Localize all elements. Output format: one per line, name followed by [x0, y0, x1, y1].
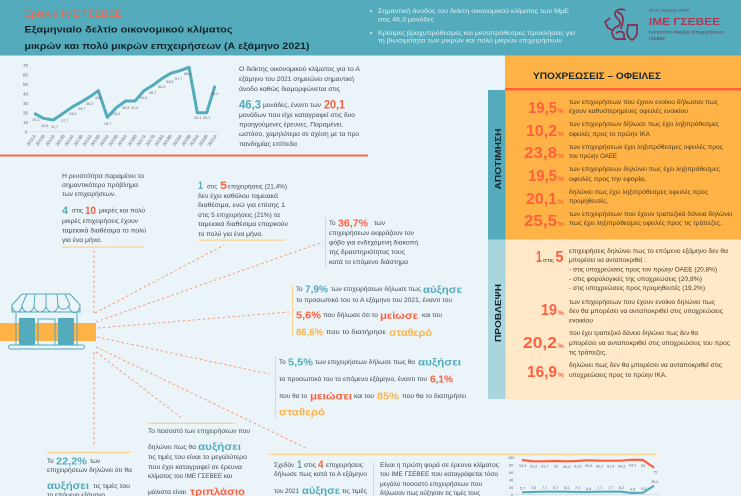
tab: valuation: ΑΠΟΤΙΜΗΣΗ [493, 128, 503, 190]
line chart: climate index: 2021Α [206, 134, 218, 147]
text block: 1 in 5 without cash: διαθέσιμα, ενώ για επίσης 1 [198, 202, 286, 209]
line chart: price trend: 90,9 [618, 464, 625, 468]
line chart: price trend: 91,2 [530, 464, 537, 468]
stat 1 in 5: - στις υποχρεώσεις προς τον πρώην ΟΑΕΕ (20,8%) [569, 266, 717, 274]
text block: staff change first half: και του [422, 312, 443, 319]
stat 19 percent: % [558, 310, 564, 317]
line chart: price trend: 6,5 [586, 487, 591, 491]
text block: 1 in 5 without cash: στις 5 επιχειρήσεις (21%) τα [198, 212, 280, 219]
line chart: climate index: 2019Β [180, 134, 192, 147]
text block: liquidity: Η ρευστότητα παραμένει το [62, 173, 145, 180]
text block: staff change first half: Το [296, 286, 303, 293]
tab: valuation [488, 90, 506, 240]
stat 25,5 banks: πως έχει ληξιπρόθεσμες οφειλές προς τις τράπεζες. [569, 220, 722, 227]
text block: liquidity: ταμειακά διαθέσιμα το πολύ [62, 228, 147, 234]
line chart: climate index: 50,6 [158, 85, 165, 89]
line chart: price trend: 25,4 [651, 480, 658, 484]
text block: staff change first half [292, 284, 462, 339]
text block: 36,7 percent fear: των [374, 220, 385, 227]
stat 1 in 5: μπορέσει να ανταποκριθεί : [569, 257, 646, 264]
line chart: climate index: 2014Β [89, 134, 101, 147]
text block: 1 in 4 raised prices: στις [304, 462, 316, 469]
stat 1 in 5: 5 [556, 249, 564, 266]
text block: liquidity [62, 173, 147, 248]
line chart: climate index: 20 [23, 110, 28, 116]
key points [370, 8, 575, 44]
line chart: climate index: 2012Α [44, 134, 56, 147]
line chart: climate index: 24,0 [69, 112, 76, 116]
line chart: climate index: 65,6 [184, 72, 191, 76]
line chart: climate index: 20,1 [203, 116, 210, 120]
stat 19,5 rent: των επιχειρήσεων που έχουν ενοίκιο δήλωσαν πως [569, 99, 718, 106]
stat 23,8 OAEE: των επιχειρήσεων έχει ληξιπρόθεσμες οφειλές προς [569, 144, 723, 151]
text block: 36,7 percent fear [325, 217, 419, 267]
line chart: price trend: 80 [509, 464, 513, 468]
line chart: climate index: 60 [23, 72, 28, 78]
logo: Έτος Ίδρυσης 2006 [648, 8, 690, 12]
text block: 36,7 percent fear: κατά το επόμενο διάστημα [329, 259, 408, 266]
text block: liquidity: μικρές και πολύ [99, 208, 146, 214]
text block: first time in survey: Είναι η πρώτη φορά σε έρευνα κλίματος [380, 462, 499, 469]
text block: price rise 22,2 percent: επιχειρήσεων δηλώνει ότι θα [47, 467, 132, 474]
line chart: price trend: 7,6 [531, 486, 536, 490]
survey label: Έρευνα ΙΜΕ ΓΣΕΒΕΕ [22, 9, 122, 20]
stat 19,5 tax [528, 166, 720, 185]
text block: 1 in 4 raised prices: Σχεδόν [274, 462, 294, 469]
text block: staff change next half: των επιχειρήσεων δήλωσε πως θα [315, 359, 415, 366]
line chart: price trend: 90,4 [563, 465, 570, 469]
text block: staff change first half: το προσωπικό του το Α εξάμηνο του 2021, έναντι του [296, 297, 453, 304]
text block: 1 in 4 raised prices: επιχειρήσεις [326, 462, 363, 469]
line chart: climate index: 17,7 [61, 119, 68, 123]
text block: 1 in 5 without cash: ταμειακά διαθέσιμα επαρκούν [198, 221, 288, 228]
logo [605, 8, 724, 41]
dashed connector lines [94, 242, 323, 449]
text block: highest share of price rises: μάλιστα είναι [148, 489, 187, 496]
line chart: climate index: 70 [23, 63, 28, 68]
stat 19,5 rent [528, 99, 718, 117]
text block: 1 in 4 raised prices: 4 [318, 459, 324, 471]
text block: 1 in 4 raised prices: δήλωσε πως κατά το Α εξάμηνο [274, 471, 368, 478]
line chart: climate index: 2012Β [54, 134, 66, 147]
line chart: price trend: 40 [509, 478, 513, 482]
line chart: climate index: 2016Β [126, 134, 138, 147]
line chart: price trend: 4,5 [630, 488, 635, 492]
line chart: price trend: 5,5 [641, 487, 646, 491]
stat 10,2 IKA: 10,2 [526, 123, 557, 140]
line chart: climate index: 13,6 [41, 124, 48, 128]
line chart: price trend: 8,2 [619, 486, 624, 490]
line chart: price trend: 20 [509, 486, 513, 490]
line chart: price trend: 8,7 [553, 486, 558, 490]
text block: highest share of price rises: κλίματος του ΙΜΕ ΓΣΕΒΕΕ και [148, 473, 233, 480]
stat 16,9 percent [527, 362, 722, 381]
panel: forecast [488, 240, 741, 399]
text block: 1 in 4 raised prices [274, 459, 368, 496]
text block: 1 in 5 without cash: το πολύ για ένα μήνα. [198, 231, 263, 238]
text block: price rise 22,2 percent: τις τιμές του [93, 483, 131, 490]
line chart: climate index: 46,3 [211, 92, 218, 96]
text block: staff change next half: 6,1% [430, 374, 453, 386]
climate index commentary: μονάδες, έναντι των [263, 102, 321, 109]
line chart: climate index: 30,8 [122, 106, 129, 110]
stat 19,5 tax: των επιχειρήσεων δηλώνει πως έχει ληξιπρόθεσμες [569, 166, 720, 173]
line chart: price trend: 100 [508, 456, 514, 460]
stat 1 in 5: 1 [536, 249, 542, 266]
text block: staff change next half: 85% [377, 392, 399, 402]
text block: 36,7 percent fear: 36,7% [338, 218, 369, 230]
line chart: climate index: 29,7 [78, 107, 85, 111]
text block: highest share of price rises: τις τιμές του είναι το μεγαλύτερο [148, 454, 248, 461]
text block: staff change next half: 5,5% [288, 358, 313, 368]
stat 16,9 percent: δηλώνει πως δεν θα μπορέσει να ανταποκριθεί στις [569, 362, 722, 369]
line chart: climate index: 41,5 [95, 96, 102, 100]
climate index commentary: άνοδο καθώς διαμορφώνεται στις [239, 86, 340, 93]
line chart: climate index: 46,7 [149, 91, 156, 95]
line chart: climate index: 2018Α [153, 134, 165, 147]
stat 19,5 tax: 19,5 [528, 168, 557, 185]
text block: 36,7 percent fear: της δραστηριότητας τους [329, 249, 405, 256]
stat 19,5 tax: % [558, 176, 564, 183]
line chart: climate index: 10 [23, 120, 28, 125]
line chart: climate index: 2015Β [107, 134, 119, 147]
title line one: Εξαμηνιαίο δελτίο οικονομικού κλίματος [24, 24, 233, 36]
line chart: price trend: 8,4 [564, 486, 569, 490]
stat 20,2 percent: μπορέσει να ανταποκριθεί στις υποχρεώσεις του προς [569, 340, 730, 347]
line chart: climate index: 11,7 [51, 125, 58, 129]
text block: staff change next half: και του [354, 393, 375, 400]
line chart: climate index: 41,0 [140, 96, 147, 100]
stat 25,5 banks: % [558, 221, 564, 228]
stat 10,2 IKA: των επιχειρήσεων δήλωσε πως έχει ληξιπρόθεσμες [569, 121, 719, 128]
stat 19,5 rent: % [558, 108, 564, 115]
stat 23,8 OAEE [524, 144, 723, 162]
stat 10,2 IKA: οφειλές προς το πρώην ΙΚΑ [569, 131, 651, 138]
stat 25,5 banks: των επιχειρήσεων που έχουν τραπεζικά δάνεια δηλώνει [569, 211, 733, 218]
text block: staff change next half: που θα το διατηρήσει [402, 393, 467, 400]
stat 19,5 tax: οφειλές προς την εφορία, [569, 176, 646, 183]
text block: liquidity: μικρές επιχειρήσεις έχουν [62, 218, 138, 225]
stat 1 in 5: στις [543, 258, 554, 264]
text block: 1 in 5 without cash: 1 [198, 180, 203, 192]
line chart: climate index: 2018Β [161, 134, 173, 147]
line chart: price trend: 91 [554, 464, 558, 468]
line chart: climate index: 31,0 [131, 106, 138, 110]
text block: price rise 22,2 percent: Το [47, 458, 54, 465]
text block: staff change first half: αύξησε [423, 284, 462, 296]
stat 19 percent: δεν θα μπορέσει να ανταποκριθεί στις υποχρεώσεις [569, 308, 723, 315]
climate index commentary: εξάμηνο του 2021 σημειώνει σημαντική [239, 76, 355, 83]
text block: price rise 22,2 percent [47, 452, 132, 496]
line chart: climate index: 2011Β [35, 134, 46, 147]
stat 1 in 5: επιχειρήσεις δηλώνει πως το επόμενο εξάμηνο δεν θα [569, 248, 728, 255]
text block: price rise 22,2 percent: αυξήσει [47, 480, 89, 492]
text block: first time in survey [373, 462, 499, 496]
climate index commentary: μονάδων που είχε καταγραφεί στις δυο [239, 112, 356, 119]
stat 16,9 percent: υποχρεώσεις προς το πρώην ΙΚΑ. [569, 372, 667, 379]
text block: staff change first half: 5,6% [296, 310, 321, 322]
stat 10,2 IKA: % [558, 131, 564, 138]
climate index commentary: ωστόσο, χαμηλότερα σε σχέση με τα προ [239, 131, 360, 138]
text block: liquidity: για ένα μήνα. [62, 237, 102, 244]
stat 19 percent: ενοικίου [569, 318, 594, 324]
line chart: climate index: 50 [23, 82, 28, 87]
line chart: climate index: 2019Α [171, 134, 183, 147]
text block: highest share of price rises: αυξήσει [198, 441, 241, 453]
line chart: price trend: 90,2 [596, 464, 603, 468]
stat 20,1 suppliers: δηλώνει πως έχει ληξιπρόθεσμες οφειλές προς [569, 189, 708, 196]
key points: στις 46,3 μονάδες [378, 16, 434, 24]
text block: highest share of price rises: Το ποσοστό των επιχειρήσεων που [148, 428, 251, 435]
line chart: climate index: 2017Β [144, 134, 156, 147]
text block: staff change next half: Το [279, 359, 286, 366]
stat 19,5 rent: 19,5 [528, 100, 557, 117]
tab: forecast: ΠΡΟΒΛΕΨΗ [493, 284, 503, 342]
key points: Σημαντική άνοδος του δείκτη οικονομικού κλίματος των ΜμΕ [378, 8, 569, 15]
text block: 1 in 4 raised prices: του 2021 [274, 488, 300, 495]
line chart: price trend: 91,7 [541, 464, 548, 468]
text block: staff change first half: 7,9% [305, 284, 328, 296]
line chart: price trend: 94,1 [629, 464, 636, 468]
text block: staff change next half: που θα το [279, 393, 308, 400]
line chart: price trend: 60 [509, 471, 513, 475]
text block: liquidity: σημαντικότερο πρόβλημα [62, 182, 138, 189]
text block: first time in survey: του ΙΜΕ ΓΣΕΒΕΕ που καταγράφεται τόσο [380, 471, 499, 478]
text block: 1 in 4 raised prices: 1 [297, 459, 302, 471]
icon: lion and shield [605, 9, 637, 40]
line chart: price trend: 7,7 [597, 486, 602, 490]
text block: highest share of price rises: που έχει καταγραφεί σε έρευνα [148, 464, 242, 471]
line chart: climate index: 2020Β [197, 134, 209, 147]
text block: liquidity: στις [72, 208, 83, 214]
line chart: climate index: 2013Α [63, 134, 75, 147]
key points: Κρίσιμες βραχυπρόθεσμες και μεσοπρόθεσμες προκλήσεις για [378, 30, 575, 37]
text block: staff change first half: που δήλωσε ότι το [323, 312, 379, 319]
text block: 1 in 5 without cash [198, 180, 288, 241]
stat 1 in 5: - στις υποχρεώσεις προς προμηθευτές (19,2%) [569, 285, 705, 292]
stat 19,5 rent: έχουν καθυστερημένες οφειλές ενοικίου [569, 108, 689, 115]
text block: price rise 22,2 percent: των [90, 458, 100, 465]
header band [0, 0, 741, 56]
stat 20,1 suppliers: προμηθευτές, [569, 198, 608, 205]
stat 1 in 5: - στις φορολογικές της υποχρεώσεις (20,8%) [569, 276, 702, 283]
climate index commentary: Ο δείκτης οικονομικού κλίματος για το Α [239, 66, 361, 73]
stat 20,2 percent: τις τράπεζες. [569, 350, 607, 356]
stat 20,2 percent: που έχει τραπεζικό δάνειο δηλώνει πως δεν θα [569, 330, 698, 337]
logo: Ινστιτούτο Μικρών Επιχειρήσεων [649, 30, 724, 34]
line chart: climate index: 2011Α [26, 134, 37, 147]
text block: staff change next half: αυξήσει [418, 356, 461, 368]
line chart: climate index: 35,2 [86, 102, 93, 106]
stat 20,2 percent: % [558, 343, 564, 350]
text block: first time in survey: μεγάλο ποσοστό επιχειρήσεων που [380, 481, 483, 488]
line chart: price trend: 5,7 [520, 486, 525, 490]
tab: forecast [488, 240, 506, 399]
climate index commentary [239, 66, 361, 148]
stat 10,2 IKA [526, 121, 719, 140]
stat 23,8 OAEE: 23,8 [524, 145, 557, 162]
line chart: climate index: 2013Β [72, 134, 84, 147]
line chart: climate index: 54,8 [166, 80, 173, 84]
text block: 1 in 5 without cash: στις [207, 184, 217, 190]
text block: liquidity: των επιχειρήσεων. [62, 191, 116, 198]
text block: staff change next half: σταθερό [279, 406, 325, 418]
stat 23,8 OAEE: τον πρώην ΟΑΕΕ [569, 153, 617, 160]
stat 19 percent: των επιχειρήσεων που έχουν ενοίκιο δηλώνει πως [569, 299, 715, 306]
line chart: climate index: 2014Α [81, 134, 93, 147]
line chart: climate index: 19,1 [32, 118, 39, 122]
stat 20,1 suppliers: % [558, 199, 564, 206]
stat 16,9 percent: % [558, 372, 564, 379]
stat 23,8 OAEE: % [558, 153, 564, 160]
line chart: price trend: 75 [653, 470, 657, 474]
logo: ΙΜΕ ΓΣΕΒΕΕ [649, 17, 720, 28]
key points: τη βιωσιμότητα των μικρών και πολύ μικρών επιχειρήσεων [378, 38, 562, 44]
text block: staff change next half: μειώσει [310, 390, 352, 402]
line chart: climate index: 26,9 [113, 112, 120, 116]
climate index commentary: πανδημίας επίπεδα [239, 141, 297, 148]
line chart: climate index: 2015Α [98, 134, 110, 147]
text block: staff change first half: των επιχειρήσεων δήλωσε πως [331, 286, 421, 293]
text block: 1 in 5 without cash: επιχειρήσεις (21,4%) [228, 184, 287, 190]
text block: staff change first half: σταθερό [389, 327, 432, 339]
text block: 36,7 percent fear: Το [329, 220, 336, 227]
line chart: climate index: 2020Α [188, 134, 200, 147]
stat 19 percent [541, 299, 723, 324]
panel heading: ΥΠΟΧΡΕΩΣΕΙΣ – ΟΦΕΙΛΕΣ [533, 71, 661, 82]
stat 20,2 percent [523, 330, 730, 356]
stat 1 in 5 [536, 248, 728, 292]
text block: 1 in 5 without cash: δεν έχει καθόλου ταμειακά [198, 193, 278, 200]
line chart: price trend: 7,7 [608, 486, 613, 490]
line chart: price trend: 90,6 [585, 464, 592, 468]
panel: obligations and debts [488, 56, 741, 240]
icon: shop [0, 294, 96, 349]
text block: highest share of price rises: δηλώνει πως θα [148, 444, 196, 451]
stat 25,5 banks: 25,5 [524, 213, 557, 230]
line chart: price trend: 91,5 [607, 464, 614, 468]
climate index commentary: 20,1 [324, 100, 346, 112]
stat 20,1 suppliers [526, 189, 708, 208]
line chart: climate index: 57,7 [175, 77, 182, 81]
stat 25,5 banks [524, 211, 733, 230]
text block: 36,7 percent fear: επιχειρήσεων εκφράζουν τον [329, 230, 414, 237]
line chart: price trend: 93,5 [519, 464, 526, 468]
climate index commentary: προηγούμενες έρευνες. Παραμένει, [239, 122, 343, 128]
text block: highest share of price rises [148, 423, 251, 496]
text block: 36,7 percent fear: φόβο για ενδεχόμενη διακοπή [329, 240, 419, 246]
text block: staff change next half: το προσωπικό του το επόμενο εξάμηνο, έναντι του [279, 376, 428, 383]
line chart: price trend [508, 456, 660, 496]
text block: price rise 22,2 percent: 22,2% [56, 456, 87, 468]
text block: staff change first half: μείωσε [380, 310, 418, 322]
text block: staff change first half: που το διατήρησε [326, 329, 386, 336]
line chart: price trend: 7,9 [575, 486, 580, 490]
text block: 1 in 5 without cash: 5 [220, 180, 227, 192]
line chart: climate index: 0 [25, 130, 28, 134]
logo: ΓΣΕΒΕΕ [649, 36, 665, 41]
stat 20,1 suppliers: 20,1 [526, 191, 557, 208]
title line two: μικρών και πολύ μικρών επιχειρήσεων (Α εξάμηνο 2021) [24, 41, 310, 52]
line chart: price trend: 91,6 [574, 464, 581, 468]
line chart: climate index [23, 63, 220, 147]
line chart: climate index: 2016Α [116, 134, 128, 147]
text block: 1 in 4 raised prices: τις τιμές [342, 488, 367, 495]
line chart: climate index: 15,7 [104, 122, 111, 126]
text block: staff change next half [275, 356, 467, 419]
line chart: climate index: 40 [23, 92, 28, 96]
stat 19 percent: 19 [541, 302, 557, 319]
line chart: climate index: 30 [23, 101, 28, 106]
stat 16,9 percent: 16,9 [527, 364, 557, 381]
line chart: price trend: 7,7 [542, 486, 547, 490]
line chart: climate index: 20,1 [194, 116, 201, 120]
text block: liquidity: 4 [62, 205, 69, 217]
text block: liquidity: 10 [85, 205, 96, 217]
line chart: climate index: 2017Α [135, 134, 147, 147]
climate index commentary: 46,3 [239, 100, 261, 112]
text block: staff change first half: 86,6% [296, 328, 323, 338]
stat 20,2 percent: 20,2 [523, 335, 557, 352]
line chart: price trend: 93 [641, 464, 645, 468]
